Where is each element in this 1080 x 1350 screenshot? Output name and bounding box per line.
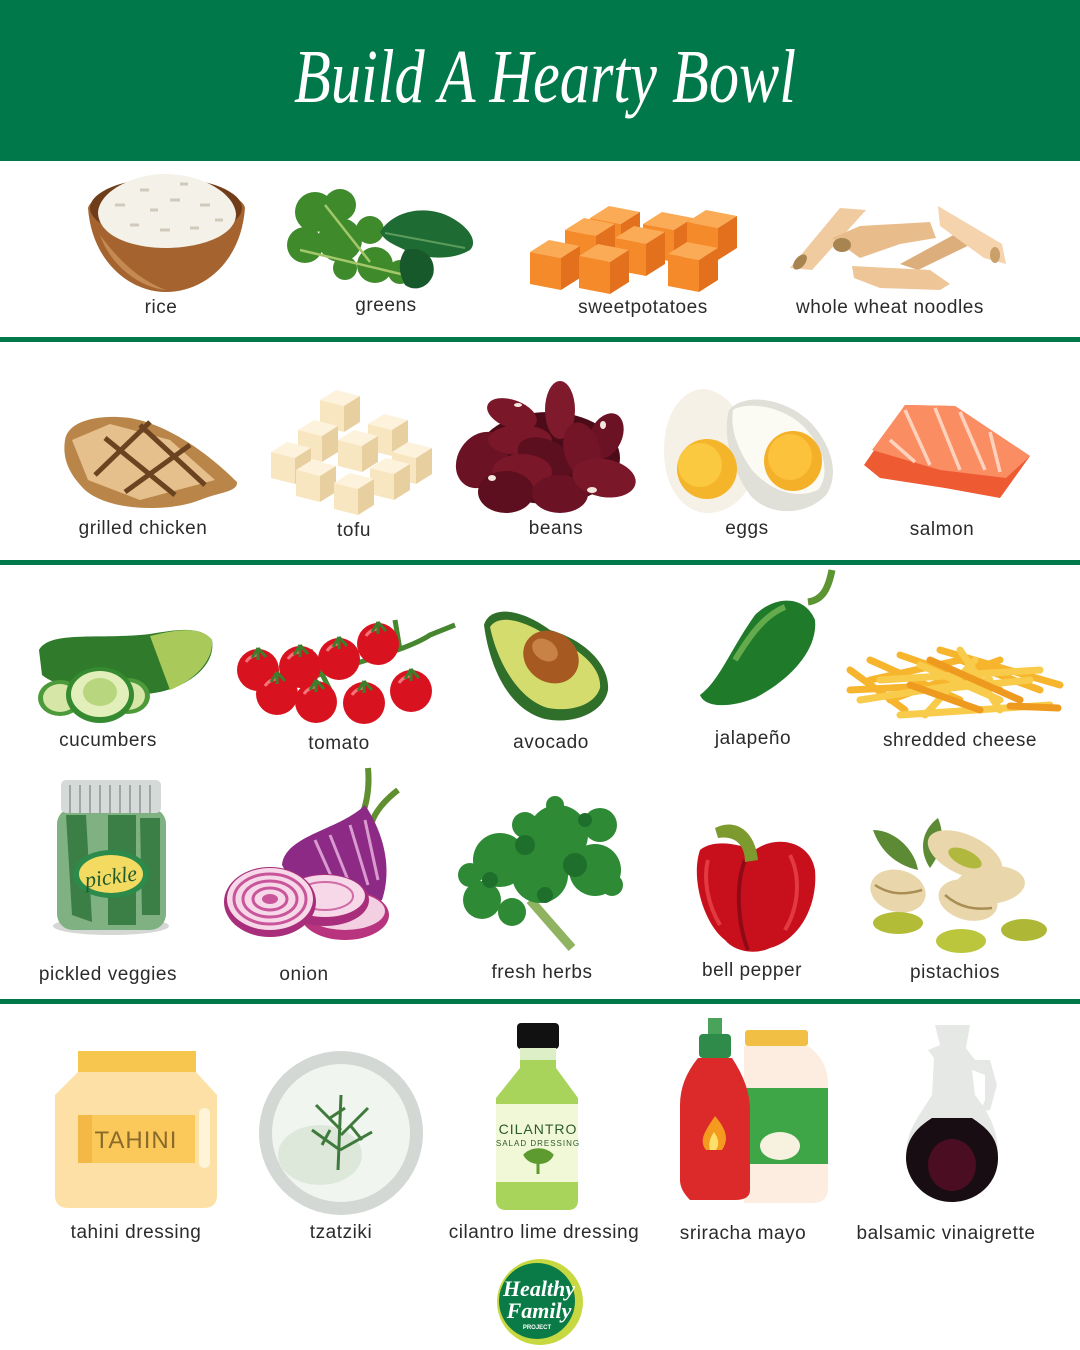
cucumbers: cucumbers bbox=[59, 730, 157, 751]
panel: protein row bbox=[64, 381, 1030, 541]
sriracha mayo bbox=[680, 1018, 828, 1244]
whole wheat noodles: whole wheat noodles bbox=[795, 297, 984, 318]
grilled chicken: grilled chicken bbox=[79, 518, 207, 539]
sweet potatoes bbox=[530, 206, 737, 318]
tahini dressing: tahini dressing bbox=[71, 1222, 201, 1243]
shredded cheese: shredded cheese bbox=[883, 730, 1037, 751]
salmon bbox=[864, 405, 1030, 540]
tofu: tofu bbox=[337, 520, 371, 541]
avocado: avocado bbox=[513, 732, 589, 753]
sweet potatoes: sweetpotatoes bbox=[578, 297, 708, 318]
logo: Healthy bbox=[502, 1276, 575, 1301]
beans bbox=[445, 381, 639, 539]
rice: rice bbox=[145, 297, 177, 318]
tahini dressing: TAHINI bbox=[95, 1127, 177, 1154]
cilantro lime dressing bbox=[449, 1023, 639, 1243]
tomato bbox=[237, 620, 455, 754]
logo: PROJECT bbox=[523, 1325, 552, 1331]
panel: veggie and topping rows bbox=[38, 570, 1060, 985]
tzatziki bbox=[259, 1051, 423, 1243]
cilantro lime dressing: SALAD DRESSING bbox=[496, 1139, 580, 1148]
panel: base row bbox=[88, 174, 1006, 318]
bell pepper bbox=[697, 825, 815, 981]
avocado bbox=[484, 612, 608, 753]
pistachios: pistachios bbox=[910, 962, 1000, 983]
bell pepper: bell pepper bbox=[702, 960, 802, 981]
eggs: eggs bbox=[725, 518, 769, 539]
fresh herbs bbox=[458, 796, 623, 983]
tofu bbox=[271, 390, 432, 541]
jalapeno: jalapeño bbox=[714, 728, 791, 749]
greens bbox=[287, 189, 473, 316]
title: Build A Hearty Bowl bbox=[294, 35, 796, 119]
tahini dressing bbox=[55, 1051, 217, 1243]
fresh herbs: fresh herbs bbox=[491, 962, 593, 983]
pickled veggies bbox=[39, 780, 177, 985]
cilantro lime dressing: cilantro lime dressing bbox=[449, 1222, 639, 1243]
jalapeno bbox=[700, 570, 832, 749]
grilled chicken bbox=[64, 417, 237, 539]
greens: greens bbox=[355, 295, 417, 316]
onion: onion bbox=[279, 964, 329, 985]
panel: dressing row bbox=[55, 1018, 1035, 1244]
shredded cheese bbox=[850, 650, 1060, 751]
sriracha mayo: sriracha mayo bbox=[680, 1223, 806, 1244]
logo: Family bbox=[506, 1298, 572, 1323]
bottle label: CILANTRO bbox=[499, 1121, 577, 1137]
eggs bbox=[664, 389, 833, 539]
pistachios bbox=[866, 818, 1047, 983]
jar label: pickle bbox=[81, 860, 139, 893]
tomato: tomato bbox=[308, 733, 370, 754]
cucumbers bbox=[38, 630, 212, 751]
whole wheat noodles bbox=[790, 206, 1006, 318]
balsamic vinaigrette: balsamic vinaigrette bbox=[857, 1223, 1035, 1244]
salmon: salmon bbox=[910, 519, 974, 540]
balsamic vinaigrette bbox=[857, 1025, 1035, 1244]
header banner bbox=[0, 0, 1080, 161]
onion bbox=[224, 768, 398, 985]
pickled veggies: pickled veggies bbox=[39, 964, 177, 985]
beans: beans bbox=[529, 518, 583, 539]
rice bbox=[88, 174, 245, 318]
logo bbox=[497, 1259, 583, 1345]
tzatziki: tzatziki bbox=[310, 1222, 372, 1243]
